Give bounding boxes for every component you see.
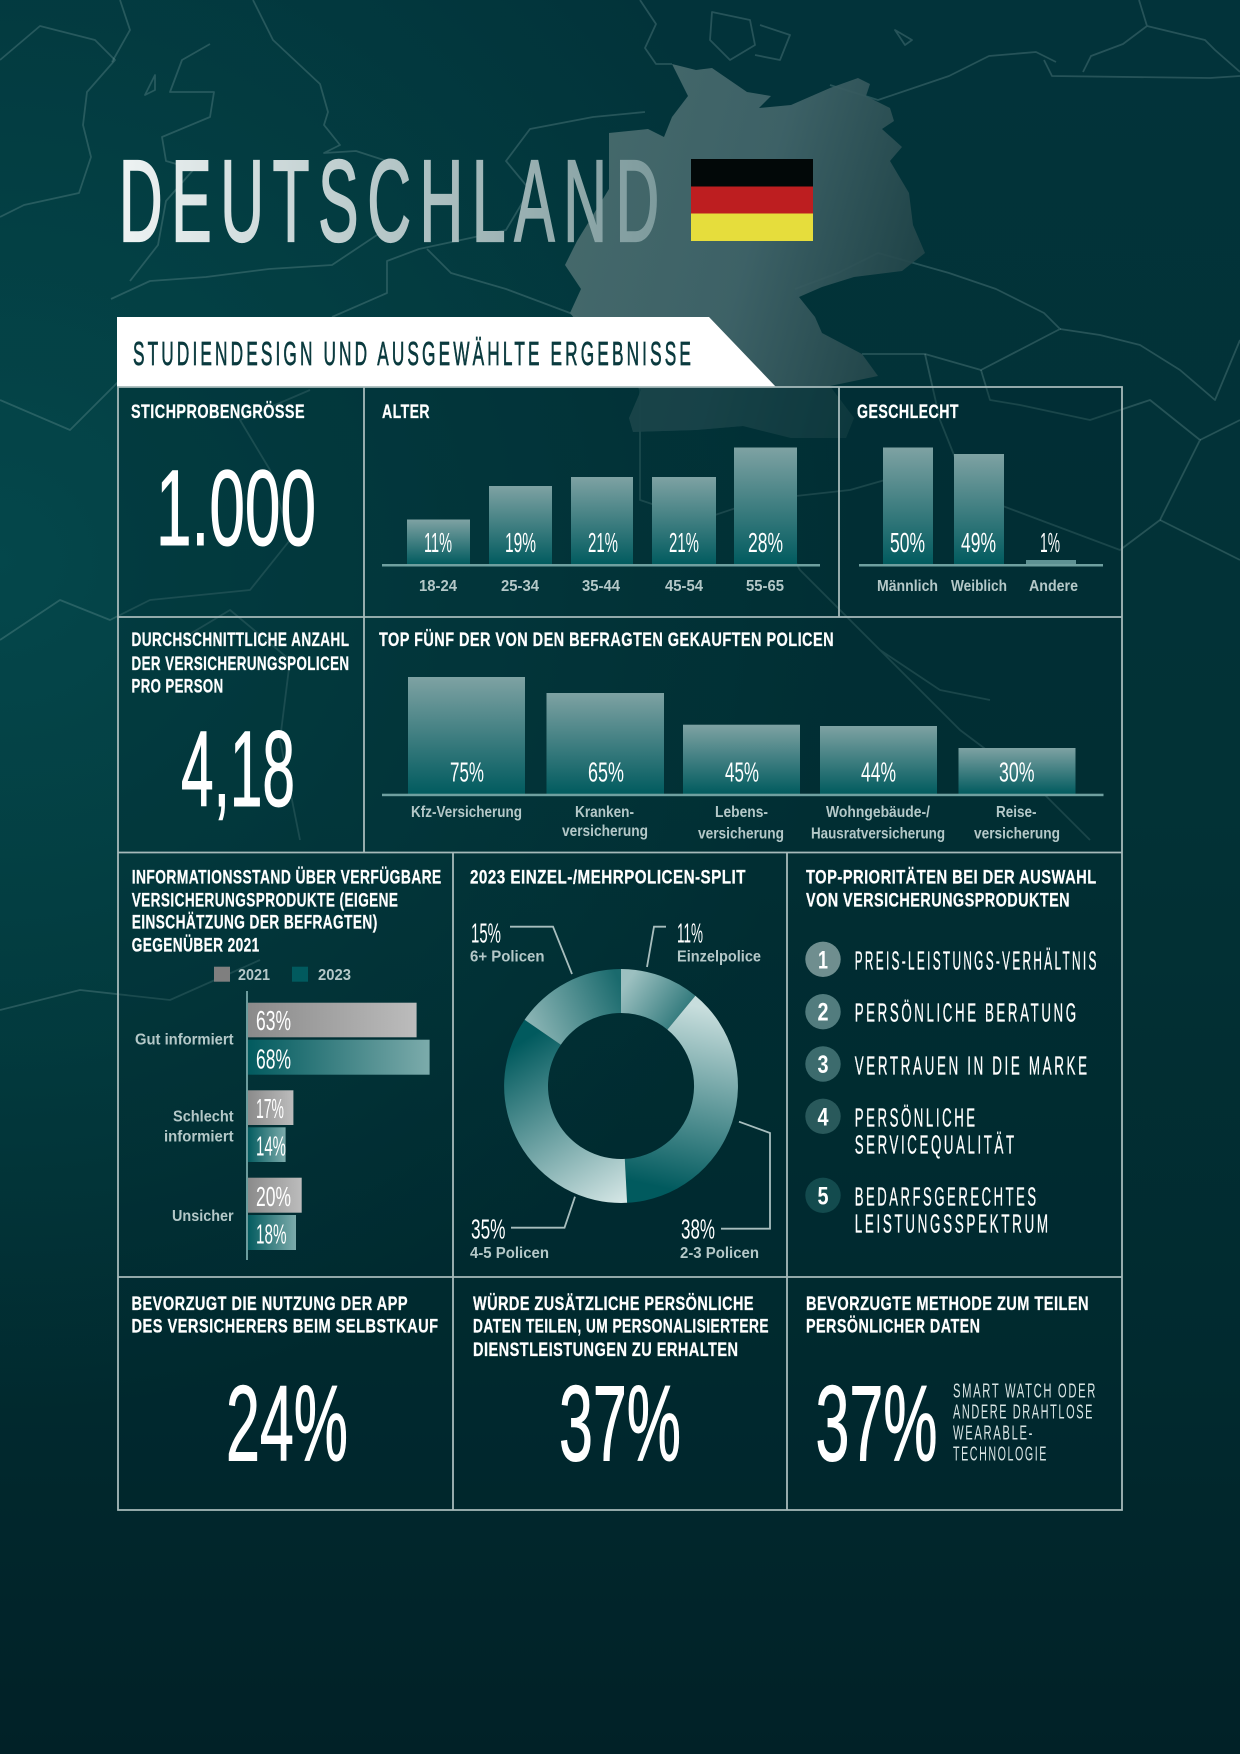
panel: top priorities list — [805, 867, 1099, 1238]
panel: gender chart: 1% — [1040, 527, 1060, 558]
panel: age chart: 18-24 — [419, 578, 457, 595]
panel: sample size — [131, 402, 316, 568]
panel: data sharing stat — [473, 1294, 769, 1484]
panel: age chart: 45-54 — [665, 578, 703, 595]
panel: age chart — [382, 402, 820, 595]
panel: data sharing stat: DATEN TEILEN, UM PERSONALISIERTERE — [473, 1317, 769, 1338]
panel: data sharing stat: 37% — [559, 1362, 681, 1484]
panel: top five policies chart: Kranken- — [575, 804, 634, 821]
panel: information level chart: 2023 — [318, 967, 351, 984]
panel: information level chart: 63% — [256, 1005, 291, 1036]
panel: gender chart: Weiblich — [951, 578, 1007, 595]
panel: information level chart: GEGENÜBER 2021 — [132, 935, 260, 956]
panel: top priorities list: SERVICEQUALITÄT — [855, 1131, 1017, 1159]
panel: age chart: 21% — [669, 527, 699, 558]
panel: gender chart: Andere — [1029, 578, 1078, 595]
panel: information level chart: VERSICHERUNGSPRODUKTE (EIGENE — [132, 891, 398, 912]
panel: preferred sharing method stat — [806, 1294, 1097, 1484]
panel: average policies: DURCHSCHNITTLICHE ANZAHL — [132, 630, 350, 651]
panel: top five policies chart: Wohngebäude-/ — [826, 804, 930, 821]
panel: app usage stat: DES VERSICHERERS BEIM SELBSTKAUF — [132, 1317, 438, 1338]
panel: age chart: ALTER — [382, 402, 430, 423]
panel: preferred sharing method stat: 37% — [816, 1362, 938, 1484]
panel: sample size: STICHPROBENGRÖSSE — [131, 402, 305, 423]
panel: preferred sharing method stat: ANDERE DRAHTLOSE — [953, 1400, 1094, 1423]
panel: information level chart: 20% — [256, 1181, 291, 1212]
panel: gender chart — [857, 402, 1103, 595]
panel: preferred sharing method stat: BEVORZUGTE METHODE ZUM TEILEN — [806, 1294, 1089, 1315]
panel: age chart: 35-44 — [582, 578, 620, 595]
panel: information level chart: 2021 — [238, 967, 270, 984]
map of Europe outlines — [0, 0, 1240, 1010]
panel: information level chart: INFORMATIONSSTAND ÜBER VERFÜGBARE — [132, 867, 442, 888]
panel: average policies: DER VERSICHERUNGSPOLICEN — [132, 654, 350, 675]
panel: single/multi policy donut chart: 15% — [471, 918, 501, 949]
panel: gender chart: 50% — [890, 527, 925, 558]
panel: top five policies chart: Kfz-Versicherung — [411, 804, 522, 821]
panel: top five policies chart: Lebens- — [715, 804, 768, 821]
panel: single/multi policy donut chart: 11% — [677, 918, 703, 949]
panel: age chart: 19% — [505, 527, 536, 558]
panel: top five policies chart: 65% — [588, 757, 624, 788]
panel: top five policies chart: versicherung — [698, 826, 784, 843]
panel: information level chart: 18% — [256, 1218, 286, 1249]
panel: age chart: 21% — [588, 527, 618, 558]
panel: top five policies chart: 75% — [450, 757, 484, 788]
panel: information level chart: Unsicher — [172, 1208, 234, 1225]
panel: app usage stat: BEVORZUGT DIE NUTZUNG DER APP — [132, 1294, 408, 1315]
panel: top priorities list: PERSÖNLICHE — [855, 1105, 978, 1133]
Germany highlighted on map — [565, 64, 925, 438]
panel: age chart: 25-34 — [501, 578, 539, 595]
panel: single/multi policy donut chart: 4-5 Policen — [470, 1245, 549, 1262]
icon: German flag — [691, 159, 813, 241]
panel: top priorities list: 2 — [818, 999, 828, 1027]
title: DEUTSCHLAND — [119, 136, 668, 266]
panel: information level chart: 17% — [256, 1093, 284, 1124]
panel: single/multi policy donut chart: Einzelpolice — [677, 949, 761, 966]
panel: age chart: 55-65 — [746, 578, 784, 595]
panel: preferred sharing method stat: WEARABLE- — [953, 1421, 1034, 1444]
panel: single/multi policy donut chart: 6+ Policen — [470, 949, 544, 966]
panel: single/multi policy donut chart: 38% — [681, 1214, 715, 1245]
panel: gender chart: 49% — [961, 527, 996, 558]
panel: top five policies chart — [379, 630, 1104, 843]
panel: top five policies chart: Reise- — [996, 804, 1036, 821]
panel: data sharing stat: WÜRDE ZUSÄTZLICHE PERSÖNLICHE — [473, 1294, 754, 1315]
panel: information level chart: Schlecht — [173, 1109, 234, 1126]
panel: gender chart: GESCHLECHT — [857, 402, 959, 423]
panel: app usage stat — [132, 1294, 438, 1484]
panel: preferred sharing method stat: SMART WATCH ODER — [953, 1380, 1097, 1403]
panel: average policies: 4,18 — [181, 708, 295, 829]
panel: single/multi policy donut chart: 35% — [471, 1214, 506, 1245]
panel: information level chart: informiert — [164, 1129, 234, 1146]
panel: top priorities list: VON VERSICHERUNGSPRODUKTEN — [806, 891, 1070, 912]
panel: top five policies chart: versicherung — [562, 823, 648, 840]
panel: top five policies chart: versicherung — [974, 826, 1060, 843]
panel: top five policies chart: 44% — [861, 757, 896, 788]
panel: age chart: 11% — [424, 527, 452, 558]
panel: top five policies chart: TOP FÜNF DER VON DEN BEFRAGTEN GEKAUFTEN POLICEN — [379, 630, 834, 651]
panel: top five policies chart: 45% — [725, 757, 759, 788]
panel: preferred sharing method stat: TECHNOLOGIE — [953, 1443, 1048, 1466]
panel: single/multi policy donut chart: 2023 EINZEL-/MEHRPOLICEN-SPLIT — [470, 867, 746, 888]
panel: information level chart: EINSCHÄTZUNG DER BEFRAGTEN) — [132, 913, 378, 934]
panel: single/multi policy donut chart — [470, 867, 770, 1262]
panel: top five policies chart: Hausratversicherung — [811, 826, 945, 843]
panel: gender chart: Männlich — [877, 578, 938, 595]
panel grid — [118, 387, 1122, 1510]
panel: top priorities list: BEDARFSGERECHTES — [855, 1183, 1039, 1211]
panel: preferred sharing method stat: PERSÖNLICHER DATEN — [806, 1317, 980, 1338]
panel: average policies — [132, 630, 350, 829]
panel: top priorities list: 4 — [818, 1103, 829, 1131]
panel: top five policies chart: 30% — [999, 757, 1034, 788]
panel: information level chart — [132, 867, 442, 1260]
section banner — [117, 317, 776, 387]
panel: sample size: 1.000 — [156, 447, 316, 568]
panel: top priorities list: TOP-PRIORITÄTEN BEI DER AUSWAHL — [806, 867, 1097, 888]
panel: top priorities list: LEISTUNGSSPEKTRUM — [855, 1210, 1051, 1238]
panel: average policies: PRO PERSON — [132, 677, 224, 698]
panel: single/multi policy donut chart: 2-3 Policen — [680, 1245, 759, 1262]
panel: top priorities list: 3 — [818, 1051, 828, 1079]
panel: information level chart: Gut informiert — [135, 1032, 234, 1049]
panel: information level chart: 68% — [256, 1043, 291, 1074]
panel: top priorities list: 1 — [818, 946, 828, 974]
panel: app usage stat: 24% — [226, 1362, 348, 1484]
panel: information level chart: 14% — [256, 1131, 286, 1162]
panel: age chart: 28% — [748, 527, 783, 558]
panel: data sharing stat: DIENSTLEISTUNGEN ZU ERHALTEN — [473, 1340, 738, 1361]
section banner: STUDIENDESIGN UND AUSGEWÄHLTE ERGEBNISSE — [133, 335, 694, 372]
panel: top priorities list: 5 — [818, 1182, 829, 1210]
